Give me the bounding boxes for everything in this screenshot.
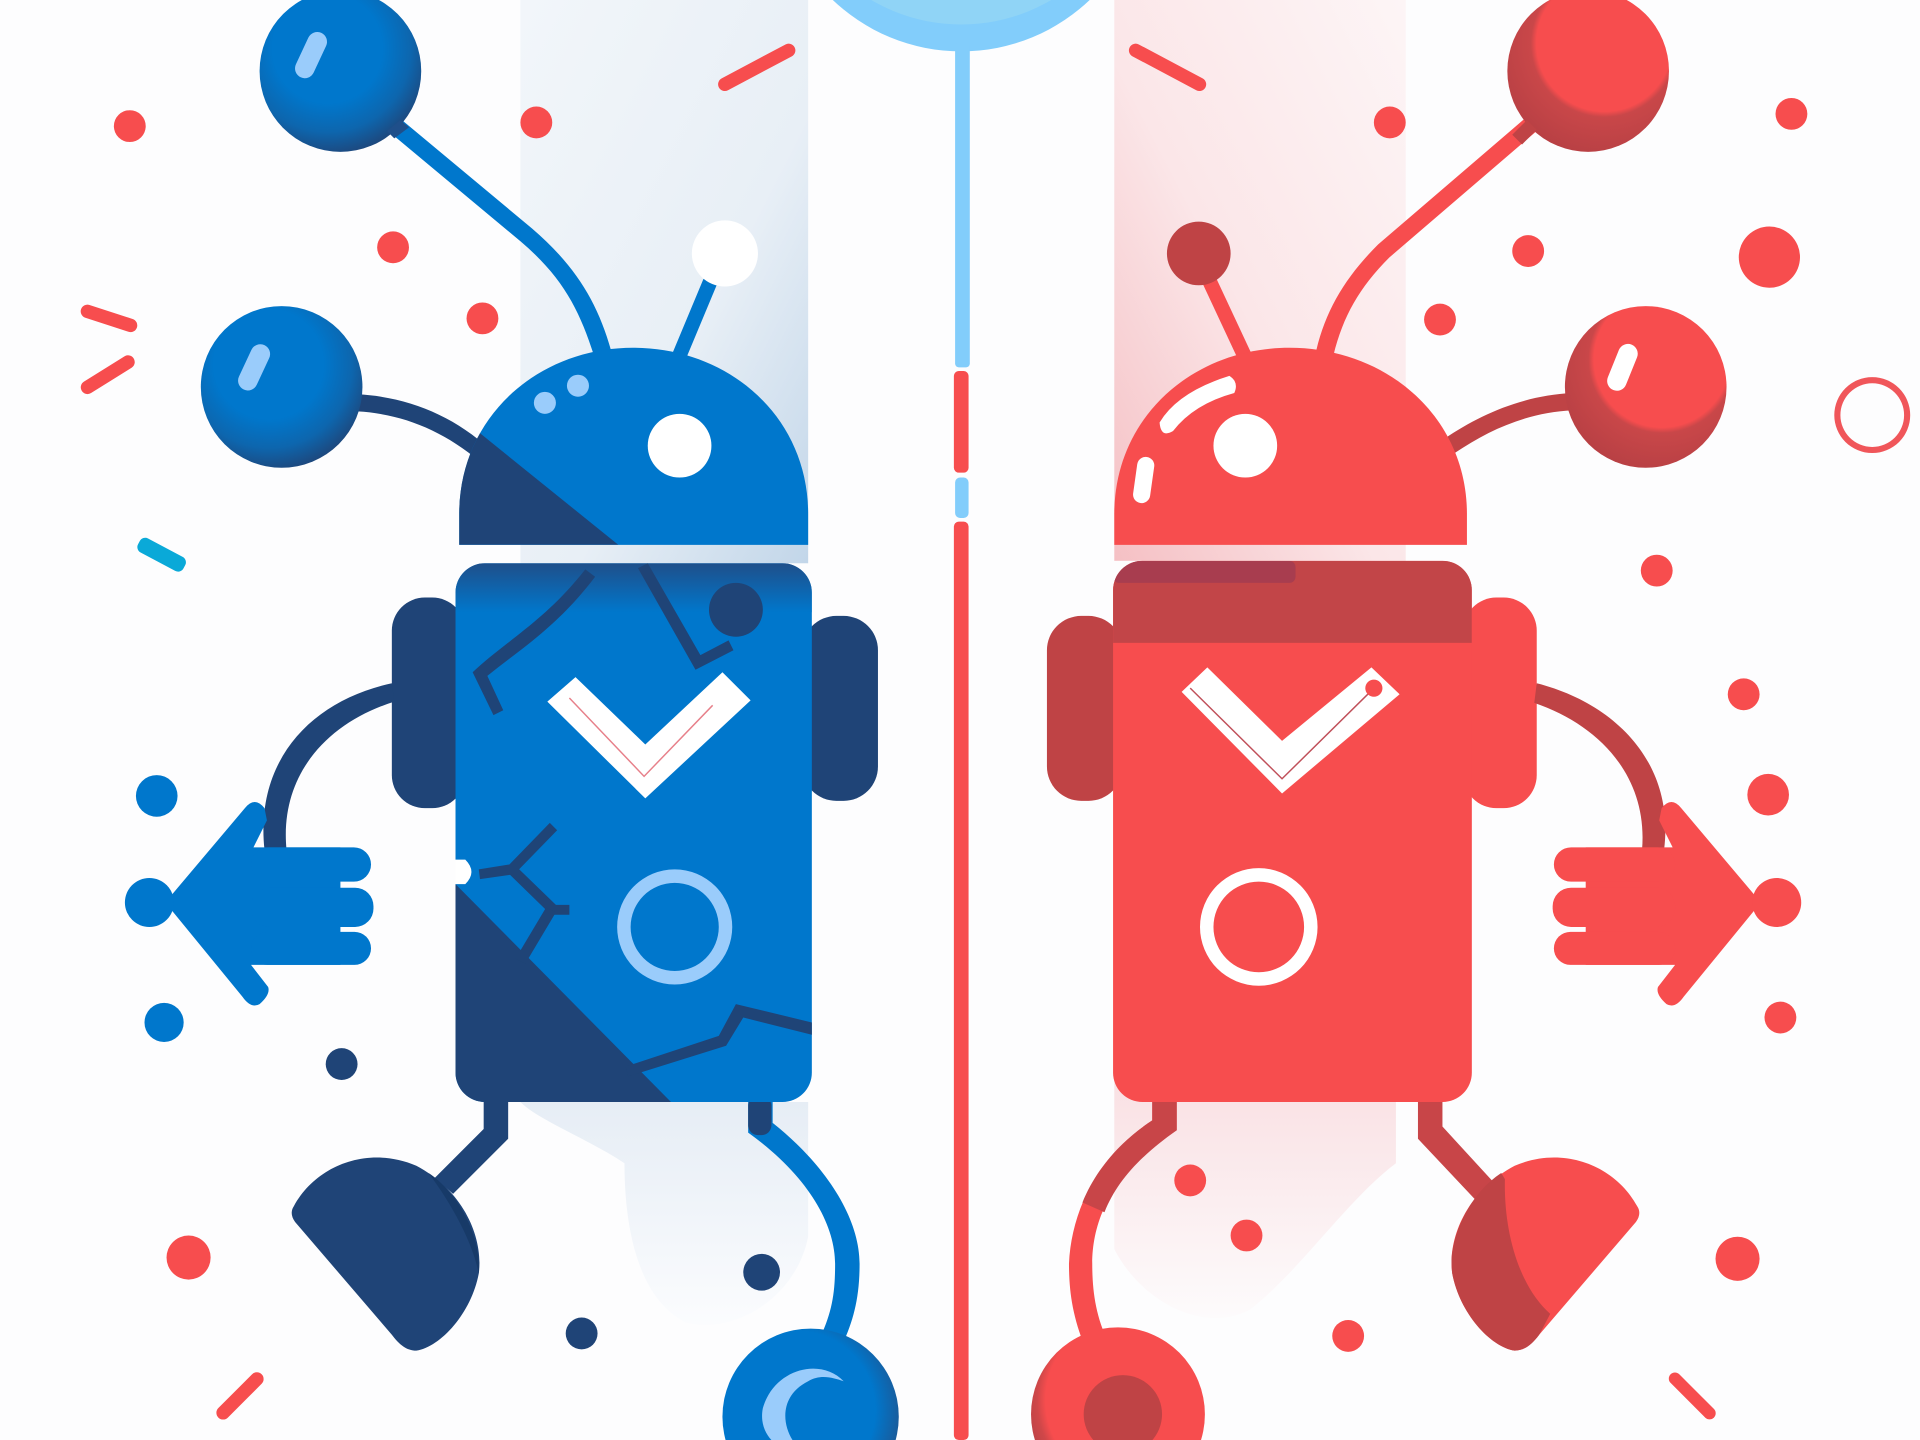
blue arm and hand — [125, 683, 394, 1005]
blue head — [441, 348, 808, 545]
confetti dots — [114, 98, 1807, 1352]
red shoulders — [1047, 598, 1537, 808]
red chevron — [1182, 667, 1400, 793]
blue antenna long — [260, 0, 611, 355]
blue foot left — [292, 1158, 479, 1351]
red legs — [1069, 1096, 1496, 1347]
center divider — [775, 0, 1147, 1440]
background texture stripes — [520, 0, 1406, 1325]
red antenna side — [1445, 306, 1727, 468]
blue antenna side — [201, 306, 490, 468]
red foot left — [1031, 1327, 1205, 1440]
blue body cracks — [473, 563, 812, 1076]
blue robot — [125, 0, 899, 1440]
red head — [1114, 348, 1467, 545]
blue body — [456, 563, 812, 1102]
red antenna long — [1316, 0, 1669, 355]
blue shoulders — [392, 598, 878, 808]
red robot — [1031, 0, 1801, 1440]
blue antenna short — [673, 220, 758, 358]
blue foot right — [722, 1329, 899, 1440]
blue legs — [435, 1096, 860, 1344]
red foot right — [1452, 1158, 1639, 1351]
red body — [1113, 561, 1472, 1102]
red arm and hand — [1534, 683, 1801, 1005]
blue chevron — [547, 672, 751, 798]
red antenna short — [1167, 222, 1251, 358]
red ring — [1200, 868, 1318, 986]
blue ring — [617, 869, 732, 984]
confetti ring — [1834, 377, 1910, 453]
